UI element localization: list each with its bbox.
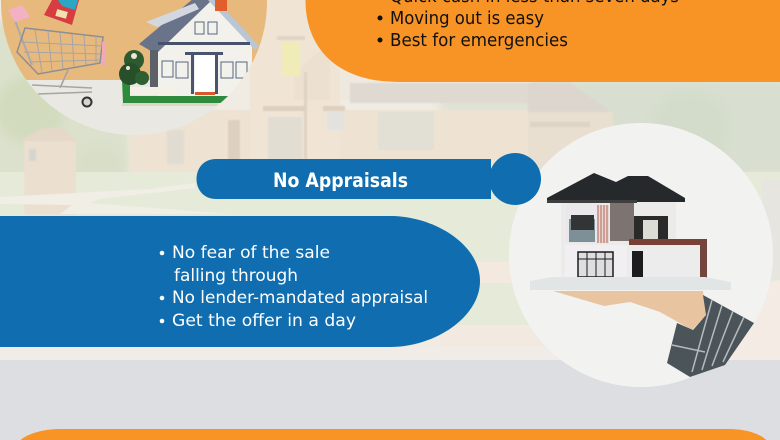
bullet list: falling through bbox=[174, 266, 298, 286]
background trees bbox=[0, 20, 780, 200]
photo circle: hand holding model house bbox=[509, 123, 773, 387]
background lawn bbox=[0, 172, 780, 330]
background paths bbox=[0, 183, 230, 214]
background road bbox=[0, 360, 780, 440]
heading: No Appraisals bbox=[196, 153, 541, 205]
icon: model house bbox=[119, 0, 259, 106]
background driveway bbox=[440, 262, 520, 283]
orange panel: benefits bbox=[305, 0, 780, 82]
bullet list: Best for emergencies bbox=[390, 31, 568, 51]
bullet list: No lender-mandated appraisal bbox=[172, 288, 428, 308]
orange panel: bottom bbox=[17, 429, 770, 440]
icon: hand bbox=[553, 291, 706, 330]
bullet list: Get the offer in a day bbox=[172, 311, 356, 331]
icon: shopping cart bbox=[8, 5, 106, 106]
bullet list bbox=[160, 243, 428, 331]
blue panel: no appraisal benefits bbox=[0, 216, 480, 347]
photo circle: shopping cart and house bbox=[0, 0, 270, 140]
background house bbox=[130, 0, 613, 172]
icon: toy blocks bbox=[44, 0, 79, 25]
bullet list: Moving out is easy bbox=[390, 9, 544, 29]
bullet list bbox=[378, 0, 679, 51]
icon: model house bbox=[530, 173, 731, 290]
background gate post bbox=[20, 128, 77, 215]
icon: knit sleeve bbox=[667, 295, 754, 377]
heading: No Appraisals: No Appraisals bbox=[273, 169, 408, 192]
bullet list: No fear of the sale bbox=[172, 243, 330, 263]
